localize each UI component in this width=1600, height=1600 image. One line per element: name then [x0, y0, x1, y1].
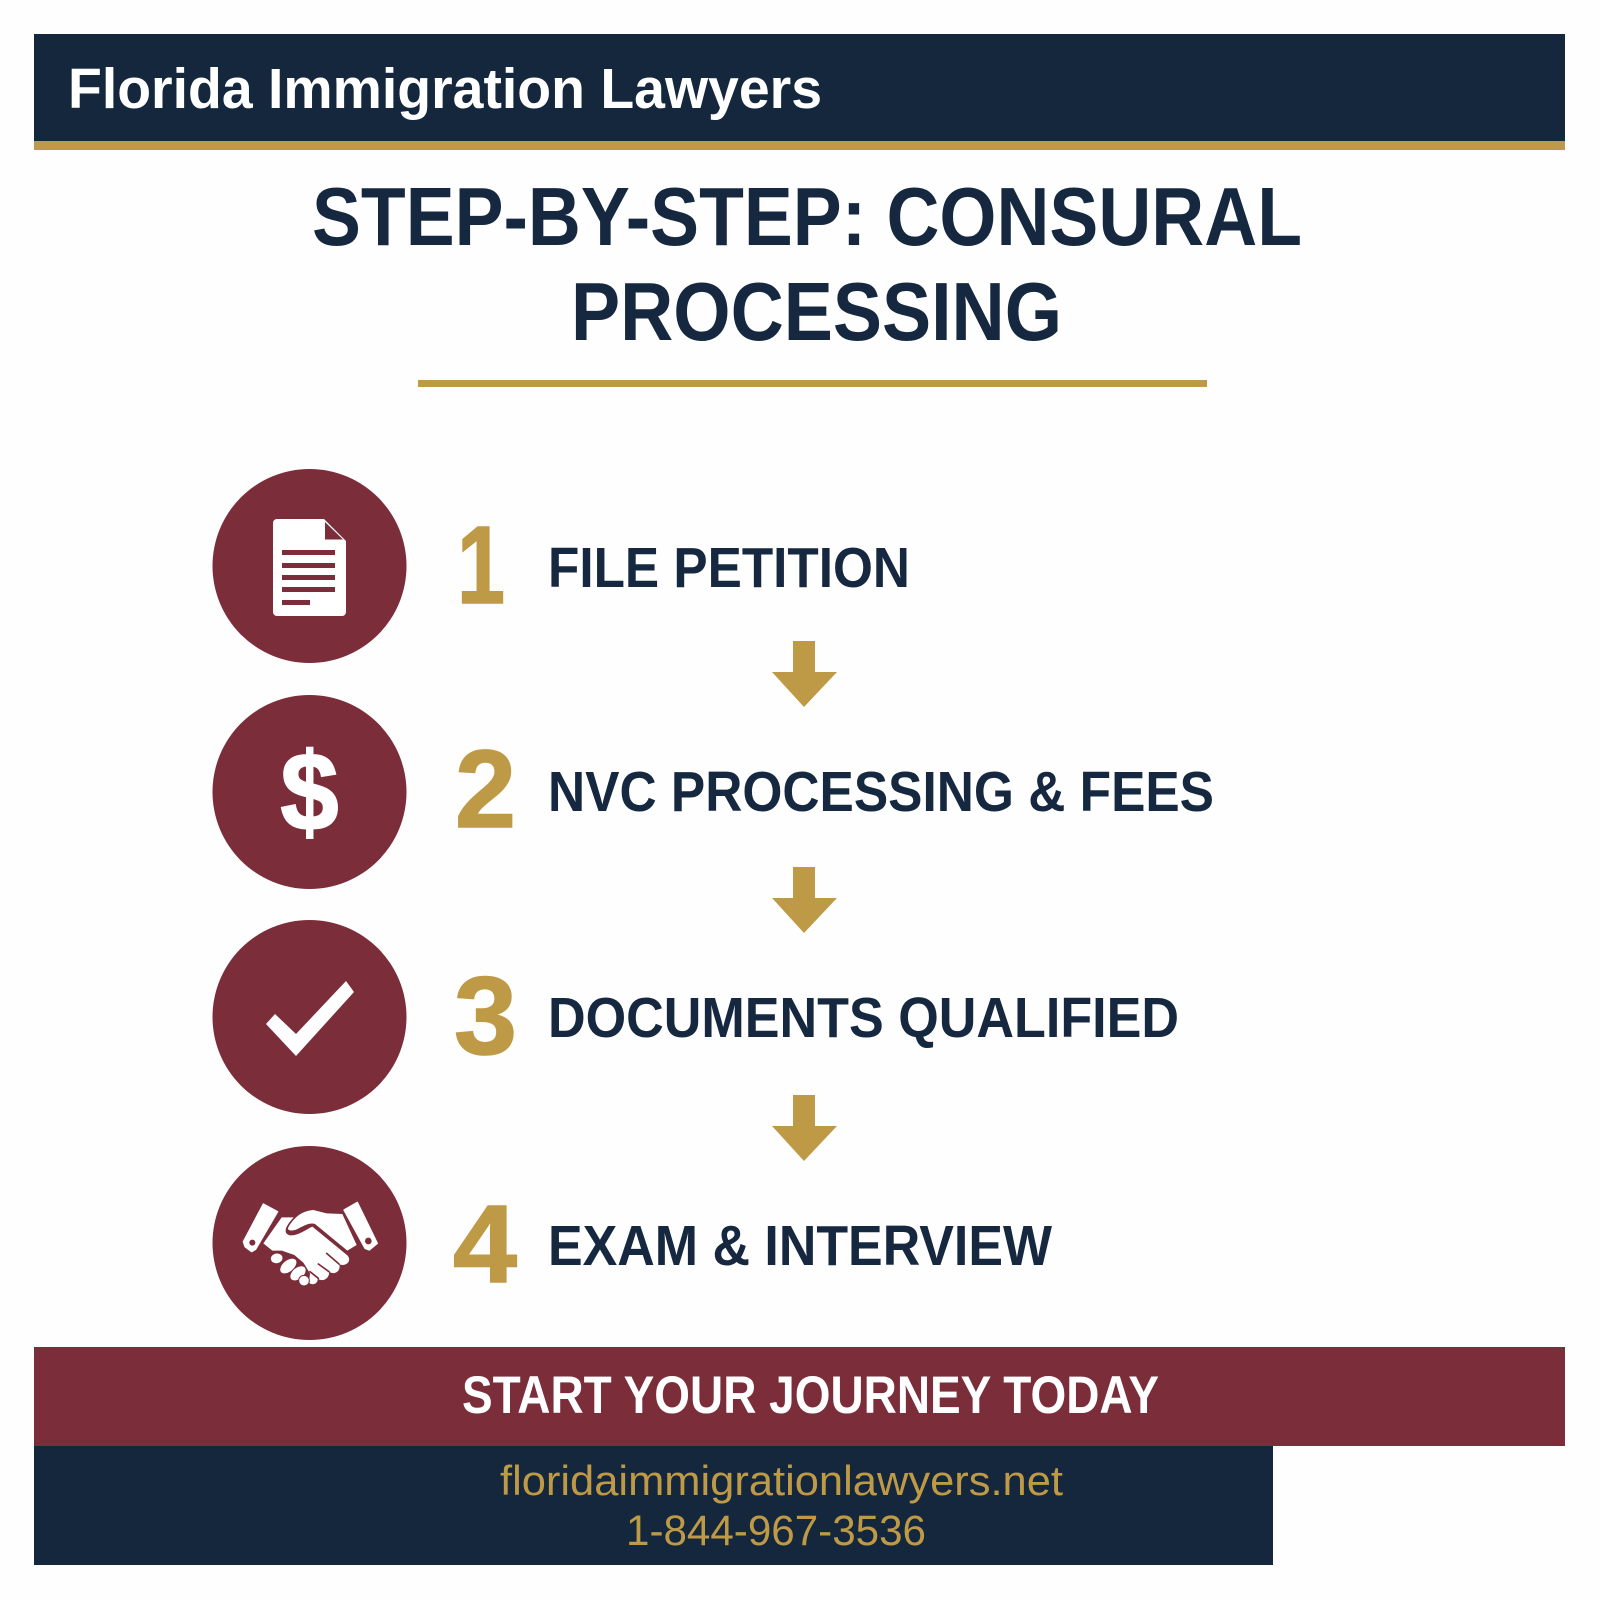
title underline	[418, 380, 1207, 387]
call to action text: START YOUR JOURNEY TODAY	[462, 1366, 1159, 1425]
icon: handshake	[212, 1146, 406, 1340]
header banner	[34, 34, 1565, 150]
arrow 2	[772, 867, 837, 933]
title: PROCESSING	[571, 265, 1062, 358]
title	[312, 170, 1302, 358]
number 4: 4	[453, 1183, 517, 1306]
number 3: 3	[454, 955, 517, 1078]
icon: document	[212, 469, 406, 663]
number 1: 1	[457, 504, 505, 627]
title: STEP-BY-STEP: CONSURAL	[312, 170, 1302, 263]
arrow 3	[772, 1095, 837, 1161]
number 2: 2	[455, 728, 516, 851]
step 4: exam and interview	[212, 1146, 1052, 1340]
step 2: NVC processing and fees	[212, 695, 1214, 889]
step 3: documents qualified	[212, 920, 1179, 1114]
step 1: file petition	[212, 469, 910, 663]
arrow 1	[772, 641, 837, 707]
brand name: Florida Immigration Lawyers	[68, 57, 822, 121]
label: EXAM & INTERVIEW	[548, 1214, 1052, 1278]
icon: dollar sign	[212, 695, 406, 889]
label: FILE PETITION	[548, 536, 910, 600]
label: DOCUMENTS QUALIFIED	[548, 986, 1179, 1050]
phone: 1-844-967-3536	[626, 1507, 926, 1555]
contact panel	[34, 1446, 1273, 1565]
icon: check mark	[212, 920, 406, 1114]
label: NVC PROCESSING & FEES	[548, 760, 1214, 824]
call to action banner	[34, 1347, 1565, 1446]
icon: dollar sign: $	[280, 731, 338, 854]
website: floridaimmigrationlawyers.net	[500, 1457, 1063, 1504]
